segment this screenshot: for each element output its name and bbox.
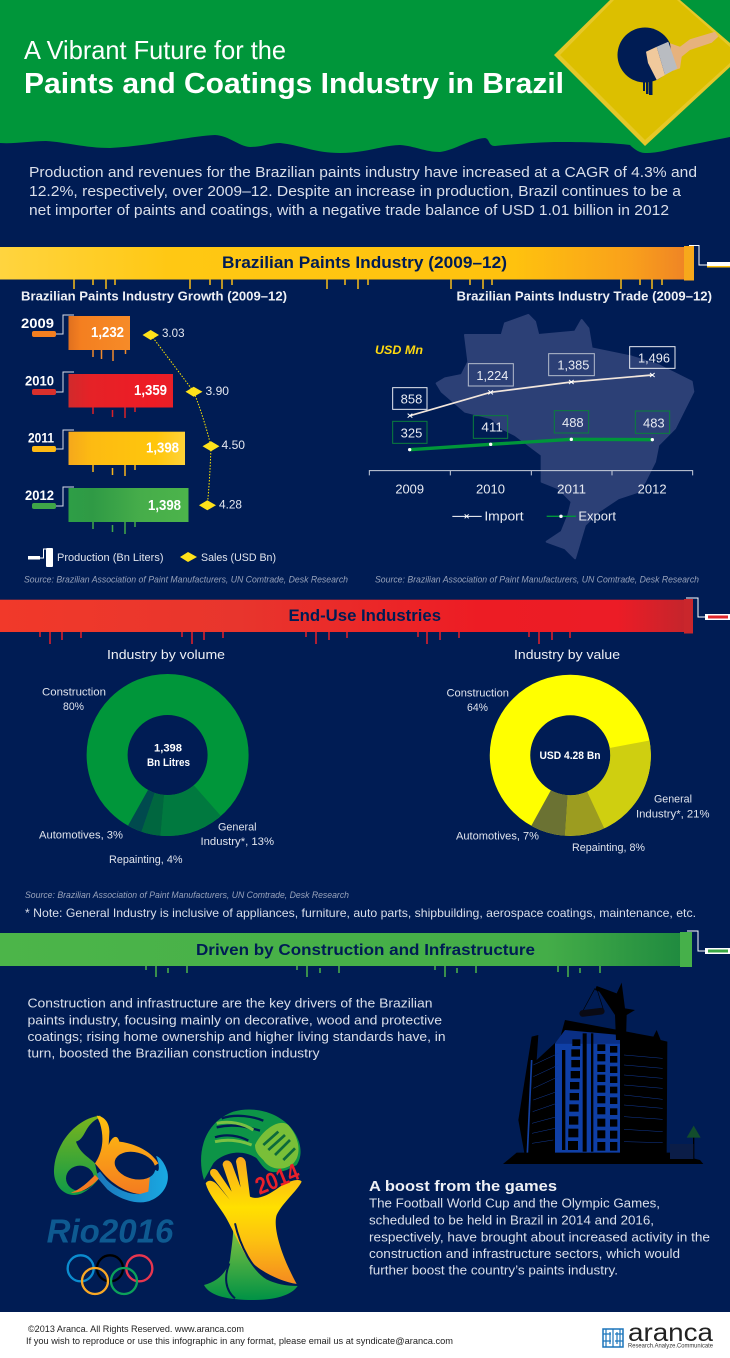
line chart: import and export: Import (484, 510, 524, 524)
map of Brazil (437, 315, 693, 558)
copyright text: ©2013 Aranca. All Rights Reserved. www.aranca.com (28, 1324, 244, 1335)
panel: production and sales growth (21, 288, 348, 584)
icon: yellow diamond with paint brush (554, 0, 730, 146)
heading: trade: Brazilian Paints Industry Trade (2009–12) (456, 288, 712, 304)
logo: aranca: aranca (628, 1319, 713, 1347)
icon: building under construction (503, 983, 703, 1164)
title: A Vibrant Future for the (24, 35, 286, 65)
title (24, 35, 564, 100)
heading: volume: Industry by volume (107, 647, 225, 662)
rio wordmark: Rio2016 (47, 1214, 174, 1251)
donut labels: value: General (654, 794, 692, 806)
bar: 2011 (28, 430, 185, 476)
source: end-use: Source: Brazilian Association of Paint Manufacturers, UN Comtrade, Desk Research (25, 890, 349, 900)
label: USD Mn: USD Mn (375, 343, 423, 357)
intro text (29, 164, 697, 219)
donut labels: value: Construction (446, 688, 509, 700)
bar: 2009: 1,232 (91, 324, 124, 341)
banner: End-Use Industries: End-Use Industries (288, 606, 441, 625)
rio emblem (54, 1116, 168, 1202)
banner: End-Use Industries (0, 598, 730, 644)
bar: 2010 (25, 372, 173, 418)
donut labels: value: 64% (467, 702, 488, 714)
panel: industry by value (446, 647, 710, 854)
donut labels: volume: Industry*, 13% (200, 836, 274, 848)
heading: boost: A boost from the games (369, 1178, 557, 1195)
donut labels: volume: Construction (42, 686, 106, 698)
sales line with diamonds: 3.90 (206, 384, 229, 398)
line chart: import and export: 411 (481, 421, 503, 435)
donut labels: volume: Automotives, 3% (39, 830, 123, 842)
panel: industry by volume (39, 647, 274, 866)
donut labels: volume: 80% (63, 701, 84, 713)
bar: 2009 (21, 315, 130, 361)
line chart: import and export: 858 (401, 393, 422, 407)
intro text: 12.2%, respectively, over 2009–12. Despite an increase in production, Brazil continues to be a (29, 183, 682, 200)
heading: value: Industry by value (514, 647, 620, 662)
body: boost: scheduled to be held in Brazil in 2014 and 2016, (369, 1212, 654, 1227)
bar: 2012: 2012 (25, 487, 54, 503)
text: construction and infrastructure: paints industry, focusing mainly on decorative, wood and protective (28, 1012, 442, 1027)
logo: aranca: Research.Analyze.Communicate (628, 1342, 713, 1350)
bar: 2010: 2010 (25, 372, 54, 388)
donut labels: value: Industry*, 21% (636, 808, 710, 820)
source: growth: Source: Brazilian Association of Paint Manufacturers, UN Comtrade, Desk Research (24, 574, 348, 584)
text: a boost from the games (369, 1178, 710, 1278)
donut labels: volume: General (218, 822, 256, 834)
line chart: import and export: 2009 (395, 483, 424, 497)
line chart: import and export: 483 (643, 416, 665, 430)
sales line with diamonds (142, 326, 245, 512)
logo: Rio 2016 (47, 1116, 174, 1294)
source: trade: Source: Brazilian Association of Paint Manufacturers, UN Comtrade, Desk Research (375, 574, 699, 584)
donut chart: volume (107, 694, 228, 836)
legend: production and sales: Production (Bn Liters) (57, 552, 164, 564)
body: boost (369, 1196, 710, 1278)
line chart: import and export: 1,224 (476, 369, 508, 383)
donut chart: value (510, 695, 651, 836)
sales line with diamonds: 4.50 (222, 438, 245, 452)
line chart: import and export: Export (578, 510, 616, 524)
line chart: import and export (369, 347, 693, 524)
copyright text: If you wish to reproduce or use this infographic in any format, please email us at syndicate@aranca.com (26, 1336, 453, 1347)
logo: aranca (603, 1319, 713, 1350)
donut labels: volume: 1,398 (154, 742, 182, 754)
donut labels: volume: Repainting, 4% (109, 854, 183, 866)
intro text: Production and revenues for the Brazilian paints industry have increased at a CAGR of 4.3% and (29, 164, 697, 181)
title: Paints and Coatings Industry in Brazil (24, 68, 564, 100)
text: construction and infrastructure (28, 996, 446, 1061)
banner: Brazilian Paints Industry: Brazilian Paints Industry (2009–12) (222, 253, 507, 272)
trophy year: 2014 (251, 1158, 304, 1201)
text: construction and infrastructure: turn, boosted the Brazilian construction industry (28, 1046, 320, 1061)
legend: production and sales (28, 548, 276, 567)
note: general industry: * Note: General Industry is inclusive of appliances, furniture, auto parts, shipbuilding, aerospace coatings, maintenance, etc. (25, 906, 696, 920)
panel: trade chart (369, 288, 712, 584)
olympic rings (68, 1255, 152, 1294)
banner: Driven by Construction and Infrastructure (0, 931, 730, 977)
sales line with diamonds: 4.28 (219, 498, 242, 512)
text: construction and infrastructure: coatings; rising home ownership and higher living standards have, in (28, 1029, 446, 1044)
logo: FIFA World Cup 2014 trophy (201, 1110, 304, 1300)
line chart: import and export: 2012 (638, 483, 667, 497)
donut labels: volume: Bn Litres (147, 757, 190, 769)
text: construction and infrastructure: Construction and infrastructure are the key drivers of the Brazilian (28, 996, 432, 1010)
banner: Brazilian Paints Industry (0, 246, 730, 289)
bar: 2012 (25, 487, 188, 534)
donut labels: value: Repainting, 8% (572, 842, 645, 854)
body: boost: respectively, have brought about increased activity in the (369, 1229, 710, 1244)
line chart: import and export: 325 (401, 426, 422, 440)
donut labels: value: USD 4.28 Bn (540, 750, 601, 762)
line chart: import and export: 1,496 (638, 352, 670, 366)
bar: 2011: 2011 (28, 430, 54, 446)
heading: growth: Brazilian Paints Industry Growth (2009–12) (21, 288, 287, 304)
donut labels: value: Automotives, 7% (456, 830, 539, 842)
header: green paint band (0, 0, 730, 153)
legend: production and sales: Sales (USD Bn) (201, 552, 276, 564)
intro text: net importer of paints and coatings, with a negative trade balance of USD 1.01 billion in 2012 (29, 202, 669, 219)
line chart: import and export: 1,385 (557, 359, 589, 373)
donut labels: volume (39, 686, 274, 866)
bar: 2011: 1,398 (146, 440, 179, 456)
footer (0, 1312, 730, 1358)
bar: 2012: 1,398 (148, 497, 181, 514)
banner: Driven by Construction and Infrastructure: Driven by Construction and Infrastructure (196, 942, 535, 959)
line chart: import and export: 2011 (557, 483, 586, 497)
line chart: import and export: 2010 (476, 483, 505, 497)
body: boost: The Football World Cup and the Olympic Games, (369, 1196, 660, 1211)
body: boost: further boost the country’s paints industry. (369, 1263, 618, 1278)
line chart: import and export: 488 (562, 416, 584, 430)
copyright text (26, 1324, 453, 1347)
donut labels: value (446, 688, 710, 854)
sales line with diamonds: 3.03 (162, 326, 185, 340)
bar: 2010: 1,359 (134, 382, 167, 399)
body: boost: construction and infrastructure sectors, which would (369, 1246, 680, 1261)
bar: 2009: 2009 (21, 315, 54, 331)
